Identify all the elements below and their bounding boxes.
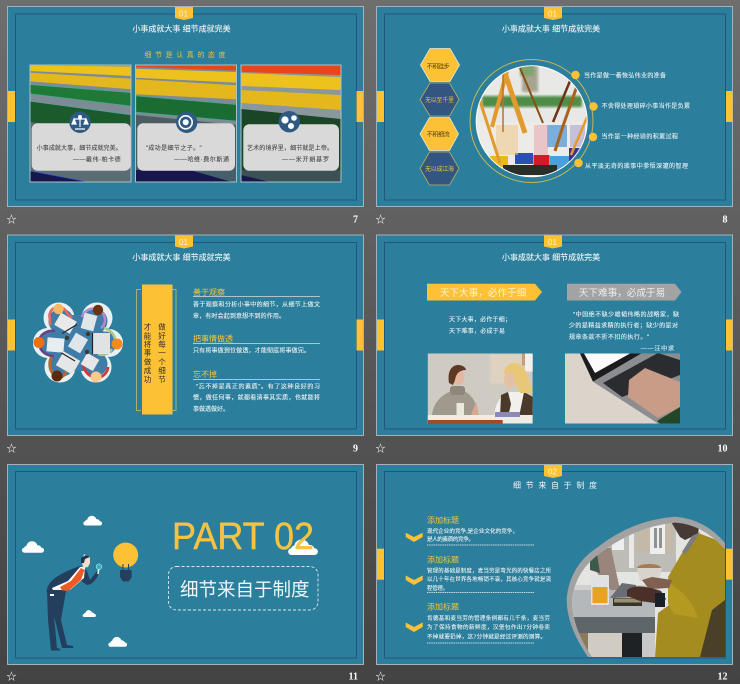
subtitle: 细节是认真的态度 <box>144 50 226 59</box>
arrow label: yellow <box>427 284 542 300</box>
text block: not forgotten: 事做透做好。 <box>193 405 229 413</box>
person 4 <box>81 353 108 382</box>
title: 小事成就大事 细节成就完美 <box>132 252 231 262</box>
subtitle box <box>168 566 318 610</box>
text block: observe <box>193 287 320 320</box>
footer: slide 10: 10 <box>718 444 728 454</box>
list item 3 <box>406 602 550 643</box>
list item 3: 为了保持食物的新鲜度，汉堡包作出7分钟卷卖 <box>427 623 550 631</box>
hexagon stack <box>420 48 460 185</box>
list item 2: 添加标题 <box>427 554 459 564</box>
title: 小事成就大事 细节成就完美 <box>502 252 600 262</box>
panel: slide 8: 01 <box>548 10 557 18</box>
text block: observe: 善于观察和分析小事中的细节，从细节上做文 <box>193 300 320 308</box>
footer: slide 9: 9 <box>353 444 358 454</box>
hexagon stack: 不积细流 <box>427 130 450 138</box>
panel: slide 12 <box>376 464 732 664</box>
photo card 1: 小事成就大事，细节成就完美。 <box>37 144 122 152</box>
bullet list: 当作是做一番恢弘伟业的准备 <box>584 72 666 80</box>
title: 小事成就大事 细节成就完美 <box>502 24 600 34</box>
list item 3: 添加标题 <box>427 602 459 612</box>
person 3 <box>92 328 122 355</box>
bullet list: 不舍得处理琐碎小事当作是负累 <box>602 102 690 110</box>
footer: slide 11 <box>6 671 358 683</box>
text block: thorough: 把事情做透 <box>193 334 233 344</box>
panel: slide 10: 01 <box>548 238 557 247</box>
clouds <box>22 516 127 647</box>
text block: right quote: "中国绝不缺少雄韬伟略的战略家，缺 <box>573 310 679 318</box>
photo card 3: 艺术的境界里，细节就是上帝。 <box>247 144 333 152</box>
list item 1: 添加标题 <box>427 515 459 525</box>
panel: slide 9: 01 <box>179 238 188 247</box>
text block: right quote: 少的是精益求精的执行者；缺少的是对 <box>569 322 678 330</box>
arrow label: gray <box>567 284 682 300</box>
photo card 3: ——米开朗基罗 <box>282 156 329 164</box>
list item 2: 管理的基础是制度，麦当劳是弯光的的快餐店之所 <box>427 566 552 574</box>
text block: left <box>449 316 511 335</box>
person 6 <box>34 331 65 356</box>
footer: slide 12: 12 <box>718 672 728 682</box>
photo: two women <box>428 354 533 424</box>
panel: slide 7: 01 <box>179 10 188 18</box>
bullet list: 从平淡无奇的琐事中参悟深邃的智理 <box>585 162 688 170</box>
text block: observe: 善于观察 <box>193 287 225 297</box>
icon: cycle <box>176 112 197 133</box>
title: 小事成就大事 细节成就完美 <box>132 24 231 34</box>
vertical banner <box>136 284 176 414</box>
footer: slide 8 <box>376 214 728 226</box>
footer: slide 11: ☆ <box>6 671 16 683</box>
footer: slide 9 <box>6 443 358 455</box>
subtitle box: 细节来自于制度 <box>180 579 310 600</box>
list item 3: 不掉就要扔掉，这7分钟就是经过评测的测算。 <box>427 632 546 640</box>
text block: not forgotten: "忘不掉是真正的素质"。有了这种良好的习 <box>196 382 320 390</box>
list item 2: 程管理。 <box>427 584 448 592</box>
footer: slide 8: ☆ <box>376 214 386 226</box>
text block: observe: 章，有时会起到意想不到的作用。 <box>193 312 285 320</box>
heading: PART 02: PART 02 <box>172 516 314 558</box>
text block: right quote: ——汪中求 <box>641 344 674 352</box>
text block: not forgotten: 惯，做任何事，就都看清事其实质，也就能将 <box>193 394 320 402</box>
list item 1: 是人的素质的竞争。 <box>427 535 474 543</box>
text block: not forgotten <box>193 369 320 413</box>
panel: slide 10 <box>376 235 732 436</box>
panel: slide 9 <box>8 235 364 436</box>
footer: slide 11: 11 <box>349 672 358 682</box>
footer: slide 10 <box>376 443 728 455</box>
text block: thorough: 只有将事做到位做透，才能彻底将事做完。 <box>193 346 310 354</box>
photo card 2: ——哈维·费尔斯通 <box>174 156 229 164</box>
panel: slide 11 <box>8 464 364 664</box>
list item 2: 以几十年在世界各地畅销不衰，其核心竞争就是流 <box>427 575 552 583</box>
text block: right quote <box>569 310 679 352</box>
list item 1 <box>406 515 534 545</box>
icon: scales person <box>69 112 91 133</box>
text block: left: 天下大事，必作于细； <box>449 316 511 324</box>
photo card 1 <box>30 65 131 182</box>
photo card 3 <box>241 65 341 182</box>
footer: slide 7: ☆ <box>6 214 16 226</box>
title: 细节来自于制度 <box>513 480 597 490</box>
list item 2 <box>406 554 552 592</box>
photo card 1: ——戴伟·帕卡德 <box>73 156 121 164</box>
vertical banner: 做好每一个细节 <box>157 322 166 384</box>
illustration: businessman with magnifier <box>47 554 102 650</box>
hexagon stack: 无以至千里 <box>425 96 454 104</box>
person 2 <box>81 305 105 331</box>
illustration: meeting table from above <box>33 302 123 382</box>
footer: slide 10: ☆ <box>376 443 386 455</box>
hexagon stack: 不积跬步 <box>427 62 450 70</box>
footer: slide 12: ☆ <box>376 671 386 683</box>
person 5 <box>50 351 80 382</box>
cloud behind number <box>288 539 318 555</box>
bullet list <box>571 71 690 170</box>
list item 3: 肯德基和麦当劳的管理条例都有几千条，麦当劳 <box>427 614 550 622</box>
panel: slide 7 <box>8 6 364 206</box>
footer: slide 12 <box>376 671 728 683</box>
text block: right quote: 规章条款不折不扣的执行。" <box>569 333 649 341</box>
vertical banner: 才能将事做成功 <box>143 322 152 384</box>
person 1 <box>49 304 77 334</box>
icon: light bulb <box>113 542 138 582</box>
photo card 2: "成功是细节之子。" <box>146 144 202 152</box>
footer: slide 8: 8 <box>722 214 728 226</box>
footer: slide 7 <box>6 214 358 226</box>
footer: slide 7: 7 <box>353 214 358 226</box>
hexagon stack: 无以成江海 <box>425 165 454 173</box>
icon: gears <box>279 111 300 132</box>
circular photo: woman at laptop <box>565 515 730 660</box>
list item 1: 现代企业的竞争,是企业文化的竞争， <box>427 527 518 535</box>
photo card 2 <box>136 65 237 182</box>
footer: slide 9: ☆ <box>6 443 16 455</box>
photo: hand on laptop <box>565 353 680 424</box>
text block: not forgotten: 忘不掉 <box>193 369 217 379</box>
text block: thorough <box>193 334 320 354</box>
arrow label: yellow: 天下大事，必作于细 <box>440 287 526 299</box>
panel: slide 12: 02 <box>548 468 557 476</box>
circular photo: paint brushes <box>470 60 594 182</box>
panel: slide 8 <box>376 6 732 206</box>
bullet list: 当作是一种经验的积累过程 <box>602 132 678 140</box>
arrow label: gray: 天下难事，必成于易 <box>579 287 665 299</box>
text block: left: 天下难事，必成于易 <box>449 327 505 335</box>
